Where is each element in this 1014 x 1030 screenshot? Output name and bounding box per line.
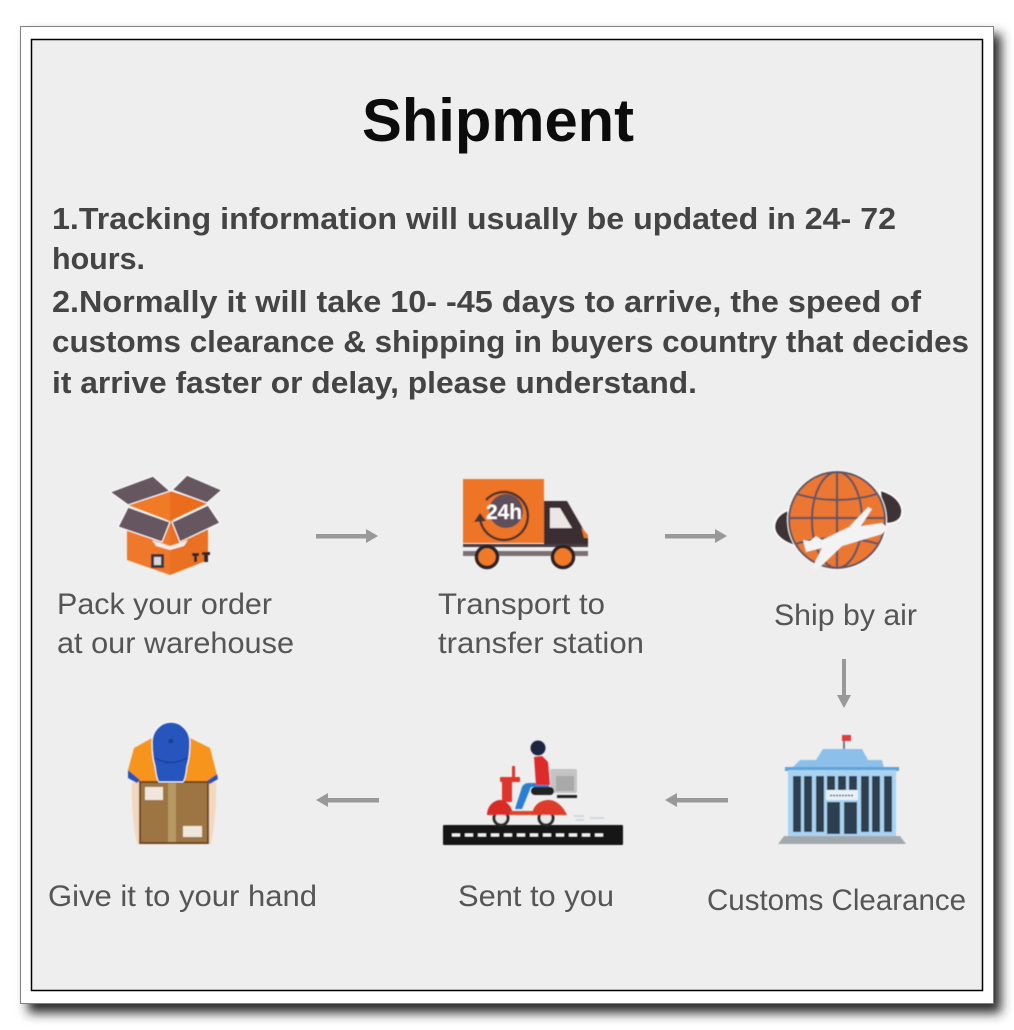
label: transport: Transport to [438, 588, 605, 621]
label: transport: transfer station [438, 627, 644, 660]
icon: courier holding parcel [128, 722, 218, 844]
text block: shipping notes: hours. [52, 241, 145, 276]
label: pack [57, 588, 294, 660]
icon: customs building [778, 735, 906, 844]
icon: delivery truck 24h [463, 479, 588, 568]
arrow: truck to plane [665, 529, 727, 543]
arrow: scooter to person [316, 793, 379, 807]
label: pack: at our warehouse [57, 627, 294, 660]
label: ship by air: Ship by air [774, 599, 917, 632]
icon: globe and plane [774, 471, 902, 570]
text block: shipping notes: 2.Normally it will take 10- -45 days to arrive, the speed of [52, 284, 922, 319]
arrow: customs to scooter [665, 793, 728, 807]
label: sent to you: Sent to you [458, 880, 614, 913]
label: give it to your hand: Give it to your hand [48, 880, 317, 913]
text block: shipping notes [52, 201, 969, 400]
arrow: plane to customs [837, 659, 851, 708]
text block: shipping notes: 1.Tracking information will usually be updated in 24- 72 [52, 201, 896, 236]
text block: shipping notes: customs clearance & shipping in buyers country that decides [52, 324, 969, 359]
label: transport [438, 588, 644, 660]
icon: scooter courier on road [443, 740, 623, 845]
arrow: box to truck [316, 529, 378, 543]
title: Shipment [362, 87, 634, 154]
icon: open box [110, 475, 222, 575]
label: customs clearance: Customs Clearance [707, 884, 966, 917]
icon: delivery truck 24h: 24h [486, 501, 522, 524]
label: pack: Pack your order [57, 588, 272, 621]
text block: shipping notes: it arrive faster or delay, please understand. [52, 365, 697, 400]
